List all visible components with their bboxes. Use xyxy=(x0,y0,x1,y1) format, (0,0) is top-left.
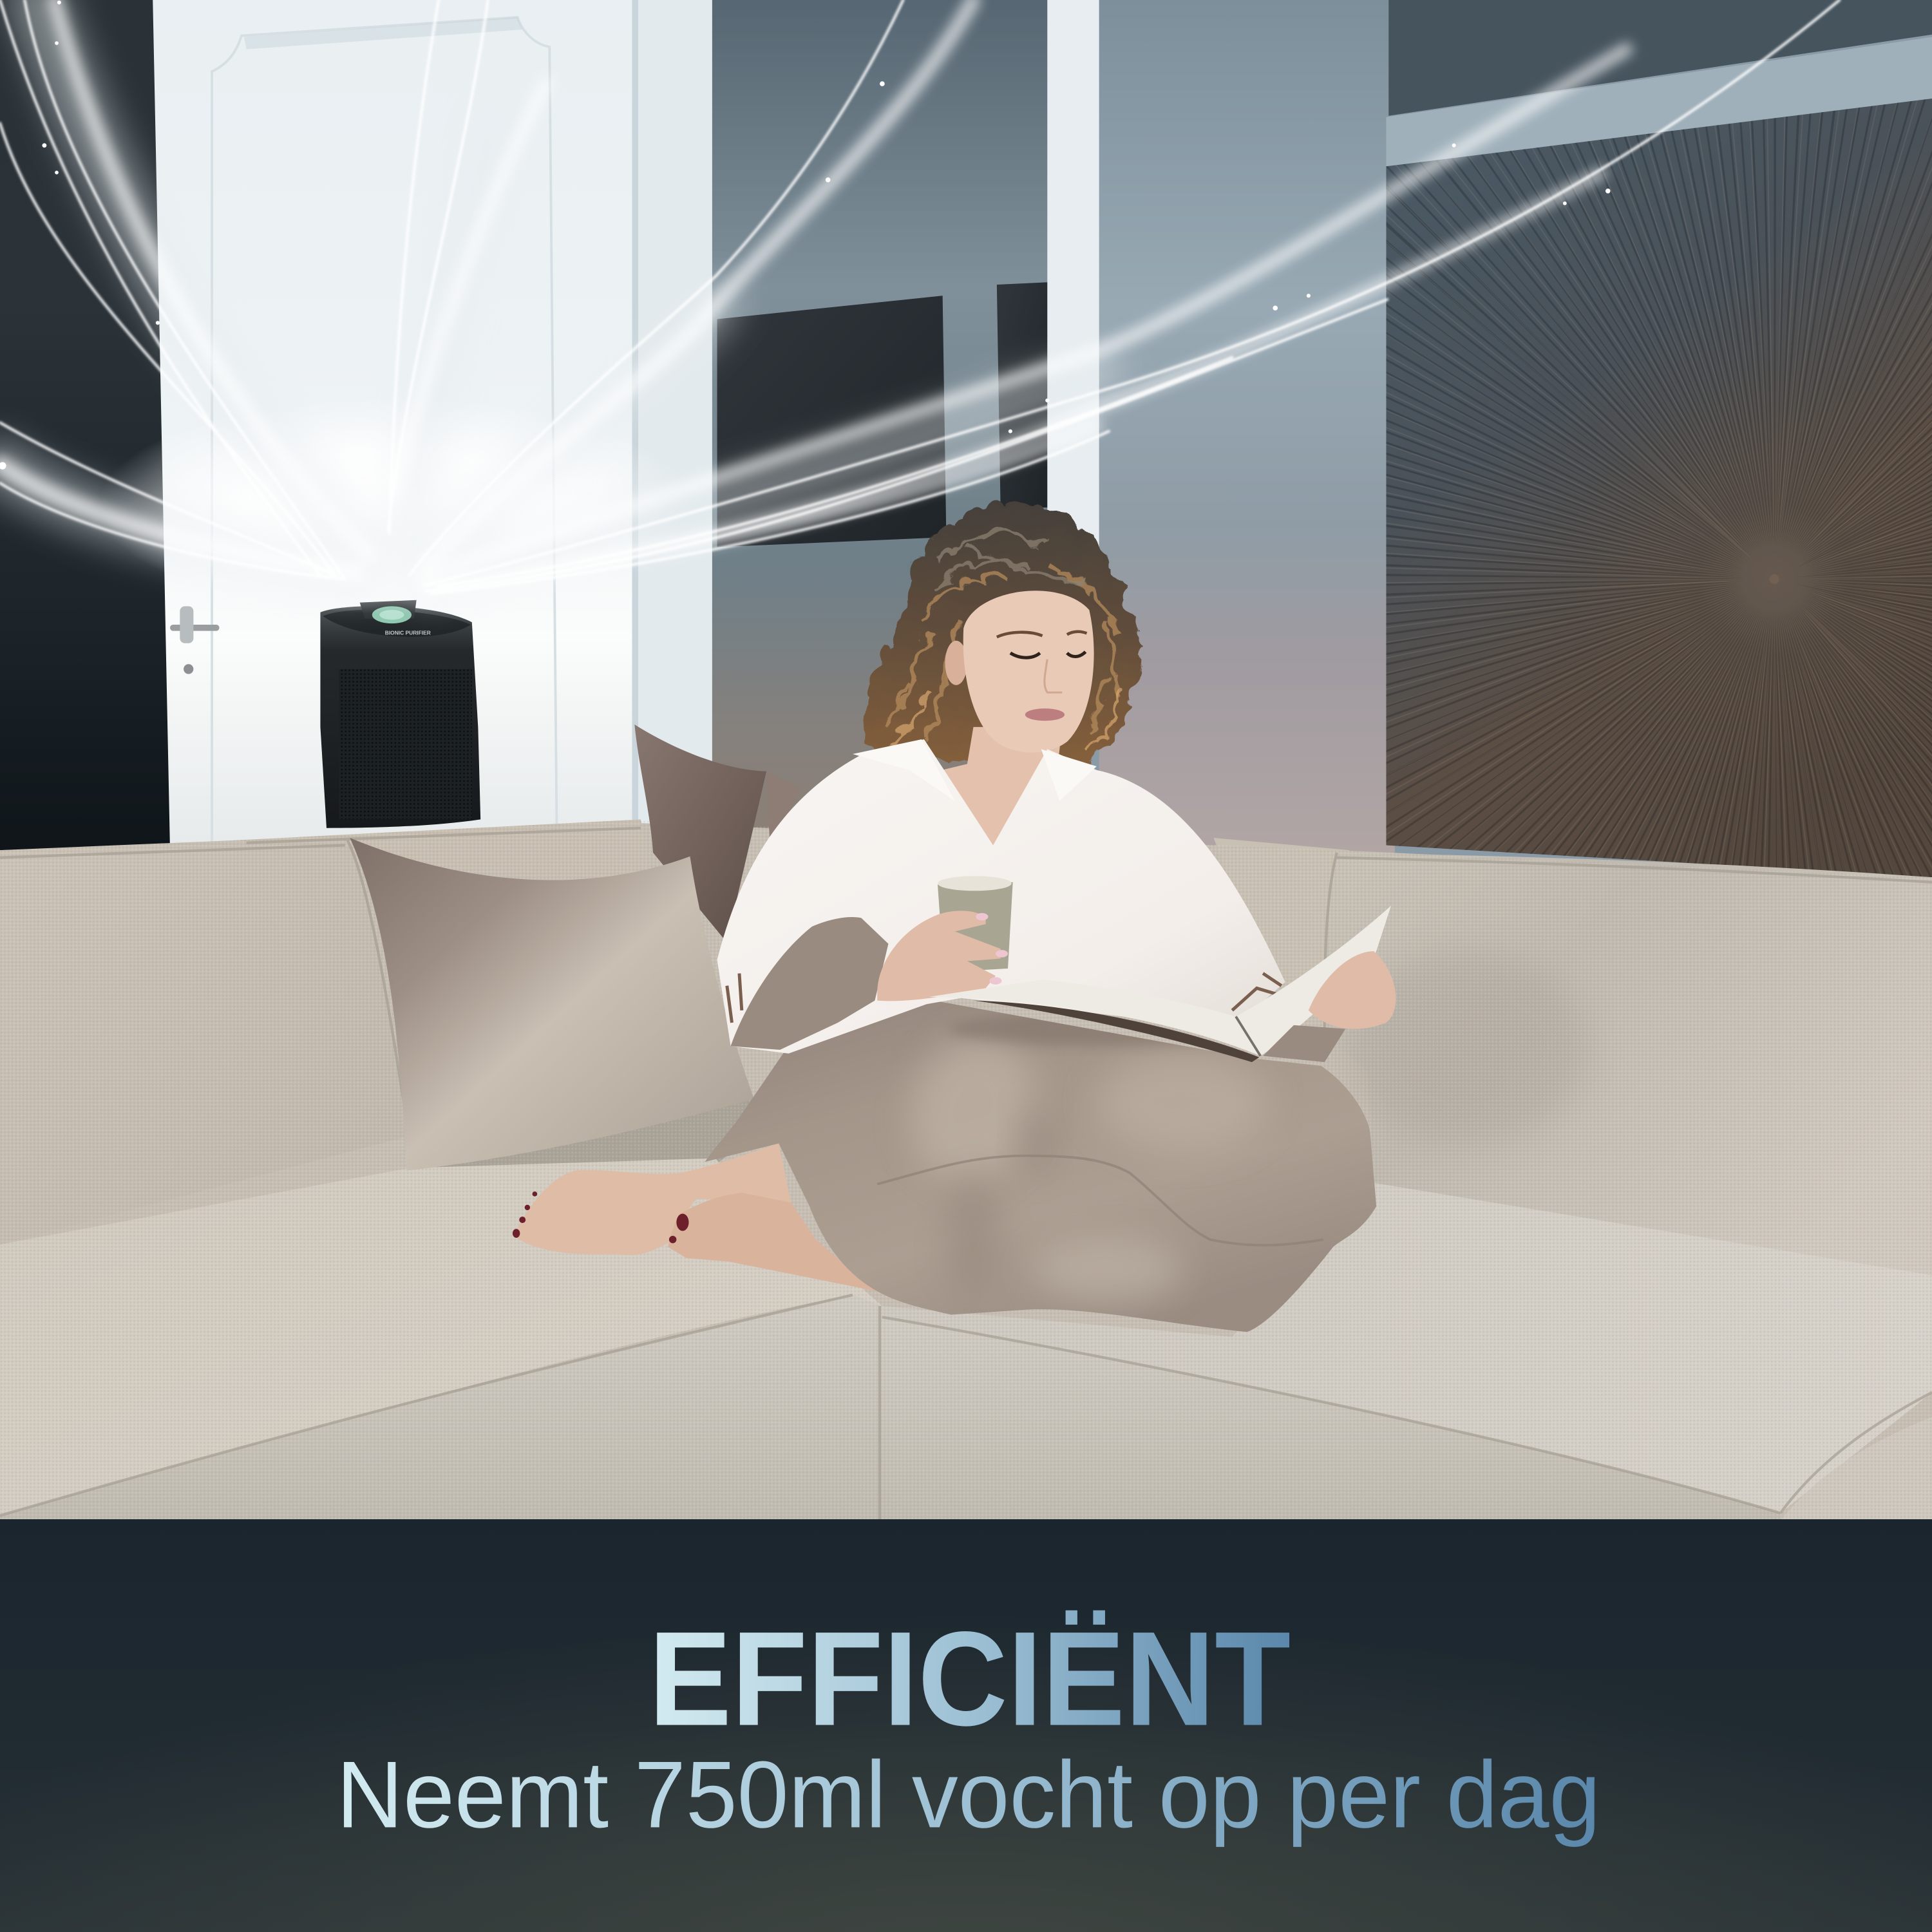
upper right strip of wall xyxy=(1386,37,1932,169)
white blouse xyxy=(717,739,1285,1054)
right hand xyxy=(1309,951,1396,1029)
hair xyxy=(859,498,1135,766)
white pillar xyxy=(1047,0,1101,554)
heading: EFFICIËNT xyxy=(649,1604,1291,1754)
doorway with dark artwork xyxy=(712,0,1050,875)
woman reading on the sofa xyxy=(513,498,1396,1332)
feet xyxy=(513,1144,877,1291)
sofa back middle right xyxy=(1214,838,1349,1059)
magazine xyxy=(929,905,1391,1062)
clean air streams xyxy=(0,0,1840,614)
back pillow xyxy=(634,724,766,943)
starburst art panel xyxy=(1380,86,1932,902)
satin highlights and folds xyxy=(877,1012,1323,1301)
air purifier xyxy=(320,600,480,828)
subheading: Neemt 750ml vocht op per dag xyxy=(336,1742,1600,1848)
wide haze xyxy=(0,0,1098,579)
left dark wall xyxy=(0,0,175,862)
central glow xyxy=(99,397,690,614)
sofa underlay xyxy=(0,823,1932,1519)
hand holding glass xyxy=(877,911,1008,1001)
gathered taupe sleeve xyxy=(731,917,888,1050)
broad soft strands xyxy=(0,0,1627,589)
back cushion right xyxy=(1325,853,1932,1275)
skirt xyxy=(705,999,1376,1332)
seat right top xyxy=(882,1183,1932,1513)
bottom banner xyxy=(0,1519,1932,1932)
seat left top xyxy=(0,1158,882,1515)
front pillow xyxy=(350,838,754,1171)
sleeve cuff right xyxy=(1263,1025,1345,1062)
face xyxy=(945,591,1094,753)
back cushion left xyxy=(0,840,409,1244)
sofa piping xyxy=(0,828,1932,1520)
inner cushion shadow band xyxy=(406,1097,754,1173)
sparkles xyxy=(0,1,1611,469)
sofa xyxy=(0,819,1932,1520)
sofa back middle xyxy=(234,819,653,887)
neck and chest xyxy=(927,727,1062,850)
coffee glass xyxy=(938,876,1013,972)
white door and frame xyxy=(153,0,716,850)
fine bright strands xyxy=(0,0,1840,594)
product label: BIONIC PURIFIER xyxy=(385,629,431,636)
soft shadow on right cushion xyxy=(1343,949,1589,1146)
seat right front xyxy=(877,1317,1781,1520)
far right cushion xyxy=(1781,1417,1932,1520)
plaster wall xyxy=(1099,0,1395,875)
satin pillows xyxy=(350,724,801,1171)
sleeve embroidery xyxy=(727,973,1282,1023)
dark art panel top xyxy=(1388,0,1932,116)
small pillow edge xyxy=(766,772,801,850)
room background xyxy=(0,0,1932,902)
fabric weave xyxy=(0,819,1932,1520)
seat left front xyxy=(0,1295,882,1520)
collar xyxy=(853,739,1097,801)
